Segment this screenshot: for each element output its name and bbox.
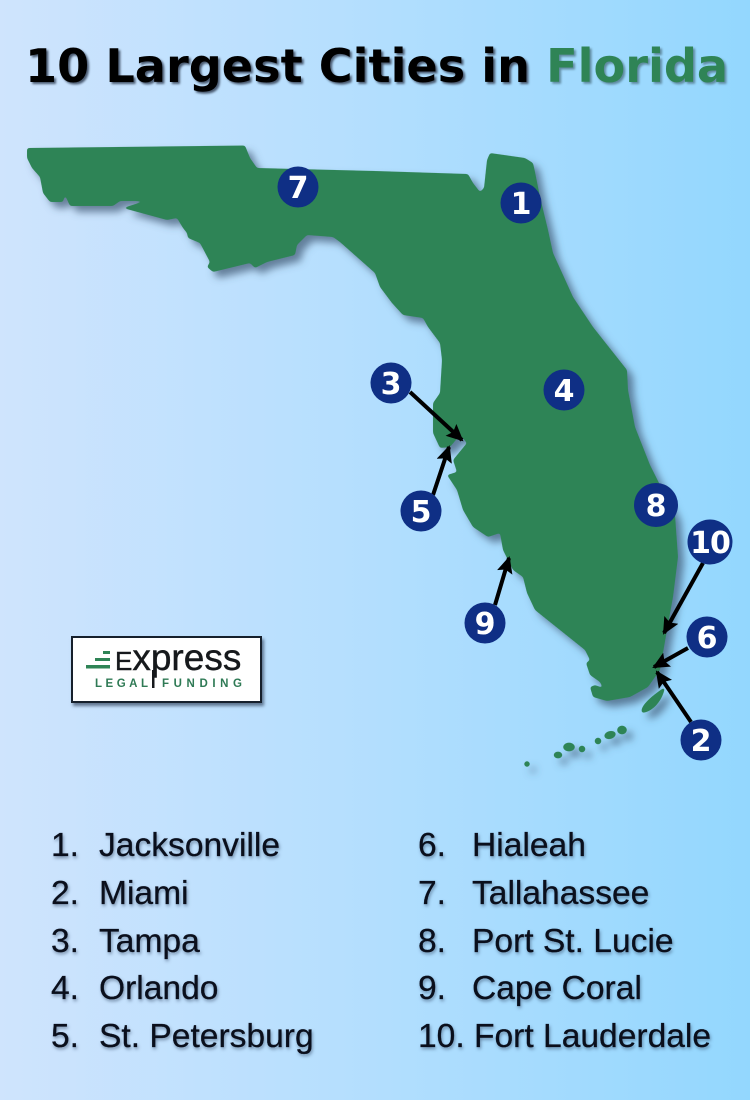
marker badges: 8 [646,489,666,524]
city list left column [51,827,314,1058]
title: 10 Largest Cities in Florida [25,39,728,93]
logo: Express Legal Funding [71,636,262,703]
marker badges: 9 [475,607,495,642]
city list right column: Cape Coral [472,970,642,1007]
city list right column [418,827,712,1055]
city list right column: Tallahassee [472,875,649,912]
marker badges: 1 [511,187,531,222]
marker badges: 3 [381,367,401,402]
Biscayne barrier island [641,687,665,713]
logo: Express Legal Funding: Express [115,638,241,678]
marker badges: 2 [691,724,711,759]
arrows [410,392,703,722]
city list left column: 1. [51,827,79,864]
city list right column: Hialeah [472,827,586,864]
marker badges: 10 [690,526,730,561]
city list left column: 2. [51,875,79,912]
city list left column: 5. [51,1018,79,1055]
city list right column: 9. [418,970,446,1007]
city list right column: Fort Lauderdale [474,1018,711,1055]
city list left column: Miami [99,875,189,912]
city list left column: St. Petersburg [99,1018,314,1055]
city list right column: 8. [418,923,446,960]
city list right column: 7. [418,875,446,912]
marker badges: 5 [411,495,431,530]
city list left column: Tampa [99,923,200,960]
city list right column: 10. [418,1018,465,1055]
Florida Keys [524,726,627,767]
marker badges: 6 [697,621,717,656]
marker badges: 4 [554,374,574,409]
logo: Express Legal Funding: LEGAL [95,678,148,690]
city list left column: Orlando [99,970,218,1007]
logo: Express Legal Funding: FUNDING [162,678,242,690]
city list left column: 4. [51,970,79,1007]
marker badges: 7 [288,171,308,206]
city list right column: Port St. Lucie [472,923,674,960]
city list left column: 3. [51,923,79,960]
Florida landmass [27,146,678,767]
city list left column: Jacksonville [99,827,280,864]
marker badges [278,166,732,760]
city list right column: 6. [418,827,446,864]
